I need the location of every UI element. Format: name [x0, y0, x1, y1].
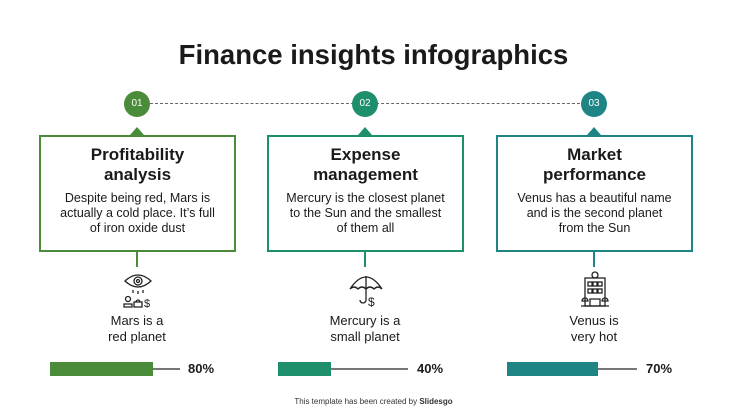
icon: eye and money [123, 274, 152, 309]
bar 70% [507, 362, 598, 376]
dashed connector [150, 103, 580, 104]
column 2 [267, 91, 464, 376]
panel: Profitability analysis: Despite being red, Mars is actually a cold place. It’s full of iron oxide dust [60, 191, 215, 235]
panel: Market performance: performance [543, 165, 646, 184]
panel: Expense management [267, 135, 464, 252]
panel: Market performance [496, 135, 693, 252]
panel: Profitability analysis: analysis [104, 165, 171, 184]
panel: Expense management: Expense [331, 145, 400, 164]
column 2: 40% [417, 361, 443, 376]
column 1: 80% [188, 361, 214, 376]
bar 80% [50, 362, 153, 376]
panel: Profitability analysis: Profitability [91, 145, 184, 164]
label [569, 313, 619, 344]
label: Mercury is a [330, 313, 400, 328]
panel: Profitability analysis [39, 135, 236, 252]
column 3: 70% [646, 361, 672, 376]
number badge 02: 02 [359, 98, 371, 109]
icon: umbrella: $ [368, 295, 375, 309]
label [330, 313, 400, 344]
pointer [358, 127, 372, 135]
number badge 01 [124, 91, 150, 117]
panel: Market performance: Venus has a beautiful name and is the second planet from the Sun [517, 191, 672, 235]
label [108, 313, 166, 344]
number badge 03 [581, 91, 607, 117]
number badge 03: 03 [588, 98, 600, 109]
bar 40% [278, 362, 331, 376]
number badge 01: 01 [131, 98, 143, 109]
panel: Market performance: Market [567, 145, 622, 164]
column 1 [39, 91, 236, 376]
label: red planet [108, 329, 166, 344]
icon: building [581, 271, 609, 307]
icon: umbrella [350, 276, 382, 309]
column 3 [496, 91, 693, 376]
panel: Expense management: Mercury is the closest planet to the Sun and the smallest of them all [286, 191, 445, 235]
label: Mars is a [111, 313, 163, 328]
label: very hot [571, 329, 617, 344]
pointer [587, 127, 601, 135]
pointer [130, 127, 144, 135]
title: Finance insights infographics [179, 39, 568, 70]
label: small planet [330, 329, 400, 344]
footer: This template has been created by Slidesgo [294, 397, 453, 406]
label: Venus is [569, 313, 619, 328]
panel: Expense management: management [313, 165, 418, 184]
number badge 02 [352, 91, 378, 117]
